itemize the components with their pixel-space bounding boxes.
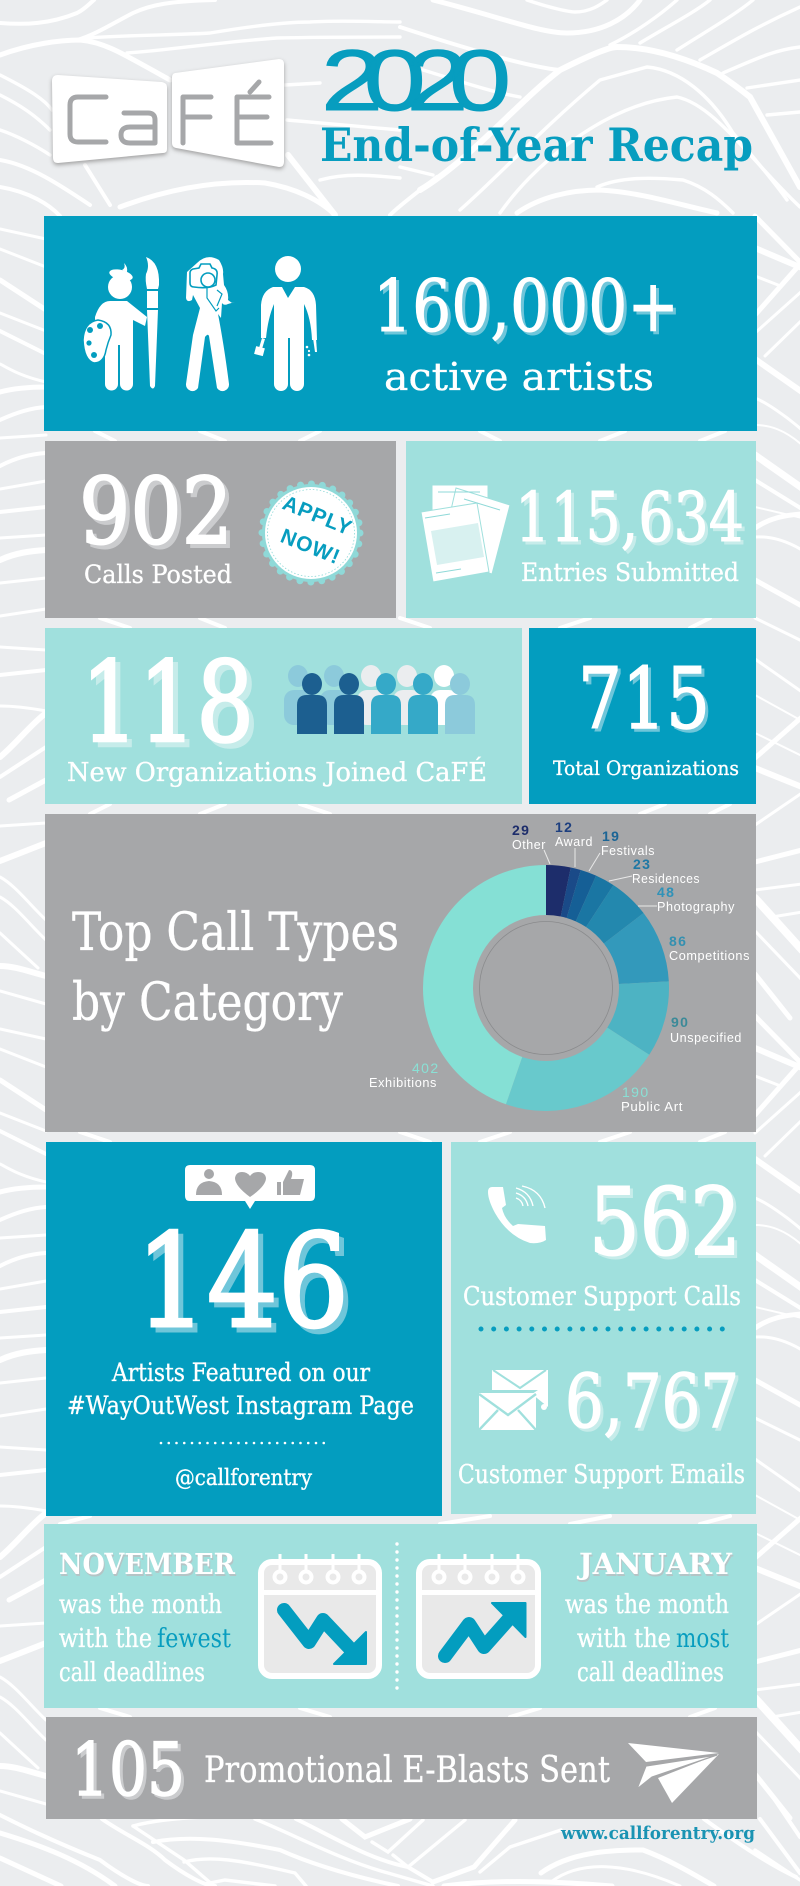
- icon: artist man: [254, 256, 317, 391]
- label: total organizations: Total Organizations: [553, 756, 739, 780]
- chart labels: 12: [555, 819, 573, 835]
- panel: e-blasts: [46, 1717, 757, 1819]
- chart labels: [369, 819, 750, 1114]
- chart labels: 86: [669, 933, 687, 949]
- text: january: was the month: [565, 1590, 729, 1620]
- chart labels: Award: [555, 834, 593, 849]
- heading: top call types by category: [72, 903, 399, 1033]
- text: january: JANUARY: [576, 1547, 732, 1581]
- text: november: with the: [59, 1624, 152, 1654]
- chart labels: Exhibitions: [369, 1075, 437, 1090]
- text: november: call deadlines: [59, 1658, 205, 1688]
- text: november: [59, 1547, 236, 1688]
- label: active artists: active artists: [384, 355, 654, 399]
- chart labels: Festivals: [601, 843, 655, 858]
- icon: painter: [83, 257, 159, 391]
- logo cards: [52, 59, 284, 167]
- label: instagram handle: @callforentry: [175, 1466, 313, 1491]
- logo wordmark: [70, 82, 271, 143]
- label: promotional e-blasts sent: Promotional E-Blasts Sent: [204, 1750, 610, 1791]
- text: january: [565, 1547, 732, 1688]
- stat: 146: 146: [136, 1207, 349, 1357]
- icon: group of people: [284, 665, 475, 734]
- chart labels: 23: [633, 856, 651, 872]
- chart labels: Other: [512, 837, 546, 852]
- text: november: was the month: [59, 1590, 222, 1620]
- panel: entries submitted: [406, 441, 756, 618]
- chart labels: 48: [657, 884, 675, 900]
- label: new organizations joined: New Organizations Joined CaFÉ: [67, 756, 487, 788]
- icon: apply now stamp: [262, 484, 360, 582]
- stat: 160,000+: 160,000+: [373, 264, 679, 348]
- text: january: most: [676, 1624, 729, 1654]
- text: january: with the: [577, 1624, 671, 1654]
- label: artists featured: #WayOutWest Instagram Page: [67, 1391, 414, 1420]
- chart labels: Competitions: [669, 948, 750, 963]
- icon: envelopes: [479, 1370, 548, 1430]
- label: calls posted: Calls Posted: [84, 560, 232, 589]
- icon: documents: [421, 485, 510, 582]
- chart labels: Unspecified: [670, 1030, 742, 1045]
- footer link: www.callforentry.org: [560, 1823, 755, 1844]
- stat: 105: 105: [71, 1728, 185, 1813]
- icon: paper plane: [628, 1743, 719, 1803]
- stat: 118: 118: [81, 639, 254, 768]
- chart labels: Public Art: [621, 1099, 683, 1114]
- donut chart: [423, 848, 669, 1111]
- heading: top call types by category: Top Call Types: [72, 903, 399, 963]
- stat: 115,634: 115,634: [515, 479, 744, 558]
- icon: calendar down: [259, 1554, 381, 1676]
- panel: calls posted: [45, 441, 396, 618]
- panel: active artists: [44, 216, 757, 431]
- stat: 715: 715: [578, 650, 710, 748]
- stat: 902: 902: [79, 458, 233, 565]
- panel: total organizations: [529, 628, 756, 804]
- stat: 6,767: 6,767: [565, 1359, 739, 1445]
- label: artists featured: Artists Featured on our: [111, 1358, 370, 1387]
- icon: calendar up: [417, 1554, 540, 1676]
- title: End-of-Year Recap: End-of-Year Recap: [320, 118, 753, 172]
- chart labels: Photography: [657, 899, 735, 914]
- label: customer support emails: Customer Support Emails: [458, 1460, 745, 1490]
- text: november: NOVEMBER: [59, 1547, 236, 1581]
- chart labels: 402: [412, 1060, 440, 1076]
- panel: top call types: [45, 814, 756, 1132]
- text: november: fewest: [157, 1624, 231, 1654]
- icon: phone: [488, 1186, 546, 1243]
- heading: top call types by category: by Category: [72, 973, 344, 1033]
- label: entries submitted: Entries Submitted: [521, 558, 739, 587]
- logo: CaFÉ: [52, 59, 284, 167]
- icon: photographer: [186, 257, 235, 391]
- icon: social bubble: [185, 1165, 315, 1209]
- stat: 562: 562: [589, 1168, 741, 1276]
- text: january: call deadlines: [577, 1658, 724, 1688]
- chart labels: Residences: [632, 871, 700, 886]
- panel: call deadlines: [44, 1524, 757, 1708]
- panel: new organizations: [45, 628, 522, 804]
- chart labels: 29: [512, 822, 530, 838]
- chart labels: 190: [622, 1084, 650, 1100]
- label: artists featured: [67, 1358, 414, 1420]
- chart labels: 90: [671, 1014, 689, 1030]
- panel: customer support: [451, 1142, 756, 1514]
- chart labels: 19: [602, 828, 620, 844]
- label: customer support calls: Customer Support Calls: [463, 1282, 741, 1312]
- icon: apply now stamp: NOW!: [277, 525, 344, 569]
- title: 2020: 2020: [321, 33, 507, 129]
- icon: apply now stamp: APPLY: [279, 492, 356, 540]
- panel: instagram artists: [46, 1142, 442, 1516]
